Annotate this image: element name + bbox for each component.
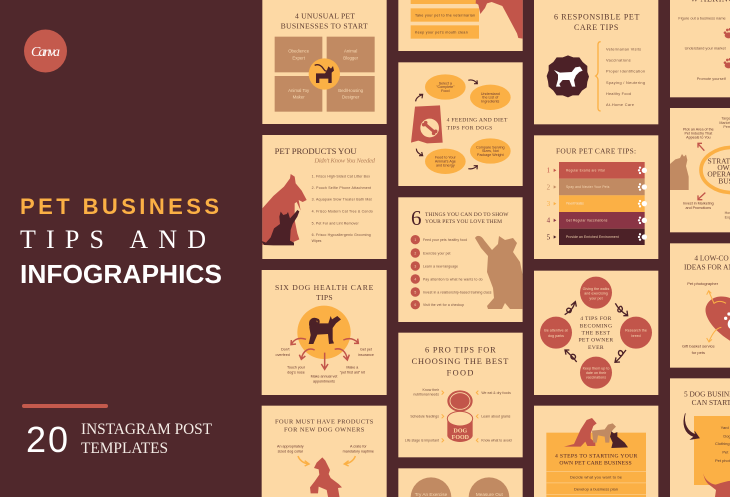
icon: dog on leash bbox=[309, 58, 340, 90]
step rows: Develop a business plan bbox=[574, 486, 618, 491]
heading: CARE TIPS bbox=[574, 23, 618, 32]
illustration: standing dog bbox=[310, 457, 342, 497]
paw icons bbox=[724, 28, 730, 68]
heading bbox=[555, 453, 638, 466]
labels: Promote yourself bbox=[697, 77, 727, 81]
labels: mandatory naptime bbox=[343, 450, 374, 454]
list: Vaccinations bbox=[606, 58, 631, 62]
right tips bbox=[481, 391, 512, 443]
heading bbox=[447, 117, 508, 132]
illustration: dog food can bbox=[447, 390, 473, 442]
heading: BECOMING bbox=[580, 323, 612, 329]
list: 1. Frisco High-Sided Cat Litter Box bbox=[312, 174, 370, 178]
heading bbox=[275, 283, 374, 302]
labels: for pets bbox=[692, 350, 705, 355]
tip circles: date on their bbox=[586, 371, 607, 375]
labels: Pet photographer bbox=[687, 281, 719, 286]
list: Yard bbox=[721, 425, 729, 430]
stacked bars bbox=[559, 162, 645, 245]
top labels: Appeals to You bbox=[686, 136, 711, 140]
quadrant boxes: Designer bbox=[342, 95, 360, 100]
heading: infographics: INFOGRAPHICS bbox=[20, 259, 222, 289]
numbered list: Pay attention to what he wants to do bbox=[423, 277, 483, 281]
numbered list: 5 bbox=[414, 290, 416, 294]
list: 6. Frisco Hypoallergenic Grooming bbox=[312, 233, 371, 237]
arrows bbox=[291, 338, 358, 369]
tip circles: dog parks bbox=[548, 334, 564, 338]
heading: CHOOSING THE BEST bbox=[412, 357, 508, 366]
quadrant boxes: Blogger bbox=[343, 55, 359, 60]
tip circles bbox=[540, 277, 652, 389]
script subheading: Didn't Know You Needed bbox=[313, 157, 376, 164]
ovals with tips: Animal's Age bbox=[435, 159, 456, 163]
top labels bbox=[683, 116, 730, 140]
right tips: Learn about grains bbox=[481, 415, 511, 419]
list: Pet bbox=[722, 449, 729, 454]
illustration: dog food can: FOOD bbox=[452, 435, 470, 441]
orange card bbox=[694, 416, 730, 485]
ovals with tips bbox=[425, 74, 511, 174]
list: Veterinarian Visits bbox=[606, 47, 641, 51]
list: Spaying / Neutering bbox=[606, 81, 645, 85]
labels: Understand your market bbox=[685, 47, 727, 51]
panel: 4 unusual pet businesses bbox=[262, 0, 387, 124]
heading: TIPS FOR DOGS bbox=[447, 126, 492, 132]
tip circles: Keep them up to bbox=[583, 366, 609, 370]
ovals with tips: "Complete" bbox=[436, 85, 455, 89]
list: Proper Identification bbox=[606, 70, 645, 74]
panel: 4 tips for becoming the best pet owner bbox=[534, 271, 658, 395]
circles: Measure Out bbox=[476, 492, 503, 497]
heading bbox=[578, 316, 614, 351]
heading bbox=[684, 254, 730, 271]
heading bbox=[281, 11, 368, 31]
quadrant boxes: Animal Toy bbox=[288, 88, 310, 93]
orange circle with dog bbox=[297, 306, 351, 359]
numbered list: 4 bbox=[414, 277, 416, 281]
labels: Make annual vet bbox=[311, 374, 337, 378]
panel: 6 responsible pet care tips bbox=[534, 0, 658, 124]
heading: FOUR MUST HAVE PRODUCTS bbox=[275, 418, 374, 425]
panel: 6 pro tips for choosing food bbox=[398, 333, 523, 457]
bottom labels: Invest in Marketing bbox=[683, 202, 714, 206]
ovals with tips: the List of bbox=[482, 96, 499, 100]
illustration: dog fragment bbox=[476, 0, 523, 39]
heading: CAN START bbox=[692, 398, 730, 407]
labels: Get pet bbox=[360, 348, 372, 352]
heading bbox=[707, 156, 730, 185]
heading: YOUR PETS YOU LOVE THEM bbox=[425, 219, 502, 225]
panel: six dog health care tips bbox=[262, 270, 387, 395]
list bbox=[312, 174, 373, 243]
numbers and pointers bbox=[547, 167, 556, 241]
tip circles: Be attentive at bbox=[544, 329, 568, 333]
heading: 4 LOW-CO bbox=[694, 254, 729, 263]
labels: Make a bbox=[346, 365, 359, 369]
stacked bars: Regular Exams are Vital bbox=[566, 168, 605, 172]
heading bbox=[425, 212, 509, 225]
heading: THINGS YOU CAN DO TO SHOW bbox=[425, 212, 509, 218]
labels: appointments bbox=[313, 380, 335, 384]
labels bbox=[678, 16, 727, 81]
icon: Canva logo: Canva bbox=[31, 45, 60, 60]
list: Healthy Food bbox=[606, 92, 631, 96]
heading: 6 PRO TIPS FOR bbox=[425, 345, 496, 354]
left tips: Life stage is important bbox=[405, 439, 439, 443]
step rows bbox=[546, 471, 646, 495]
text: instagram post templates: INSTAGRAM POST bbox=[81, 421, 212, 438]
illustration: cat silhouette bbox=[475, 236, 523, 309]
ovals with tips: Feed to Your bbox=[435, 156, 456, 160]
ovals with tips: Select a bbox=[439, 81, 453, 85]
heading: 4 STEPS TO STARTING YOUR bbox=[555, 453, 638, 459]
numbered list: Invest in a relationship-based training class bbox=[423, 290, 492, 294]
stacked bars: Spay and Neuter Your Pets bbox=[566, 185, 610, 189]
bottom labels: and Promotions bbox=[686, 206, 711, 210]
list: 4. Frisco Modern Cat Tree & Condo bbox=[312, 210, 373, 214]
numbers and pointers: 2 bbox=[547, 183, 551, 191]
dark arrow bbox=[684, 413, 699, 439]
orange list rows: Keep your pet's mouth clean bbox=[415, 31, 468, 35]
heading: 6 RESPONSIBLE PET bbox=[554, 12, 639, 21]
heading: pet business: PET BUSINESS bbox=[20, 194, 219, 219]
orange list rows: Take your pet to the veterinarian bbox=[415, 14, 475, 18]
heading bbox=[275, 418, 374, 434]
illustration: three dogs bbox=[564, 418, 628, 448]
numbered list: Feed your pets healthy food bbox=[423, 238, 467, 242]
heading: FOUR PET CARE TIPS: bbox=[556, 146, 636, 155]
circles: Try An Exercise bbox=[415, 492, 448, 497]
illustration: cat bbox=[670, 154, 689, 190]
labels: Don't bbox=[281, 348, 290, 352]
tip circles: Research the bbox=[625, 329, 647, 333]
tip circles: Giving the walks bbox=[583, 287, 609, 291]
numbered list: 1 bbox=[414, 238, 416, 242]
quadrant boxes: Obedience bbox=[288, 49, 310, 54]
numbered list: Visit the vet for a checkup bbox=[423, 303, 464, 307]
arrows bbox=[416, 80, 477, 169]
numbers and pointers: 3 bbox=[547, 200, 551, 208]
heading: 4 TIPS FOR bbox=[580, 316, 612, 322]
list: 5. Pet Fur and Lint Remover bbox=[312, 221, 359, 225]
labels: An appropriately bbox=[277, 445, 304, 449]
illustration: dog bbox=[703, 473, 730, 497]
icon: Canva logo bbox=[24, 30, 67, 72]
text: instagram post templates bbox=[81, 421, 212, 457]
heading: 4 UNUSUAL PET bbox=[295, 11, 355, 20]
labels bbox=[682, 281, 719, 355]
ovals with tips: Food bbox=[441, 89, 450, 93]
heading: tips and: TIPS AND bbox=[20, 225, 206, 254]
stacked bars: Get Regular Vaccinations bbox=[566, 218, 608, 222]
circles bbox=[411, 477, 509, 497]
text: instagram post templates: TEMPLATES bbox=[81, 440, 168, 457]
heading: PET PRODUCTS YOU bbox=[275, 146, 357, 156]
list: Clothing bbox=[715, 441, 730, 446]
labels: dog's nose bbox=[287, 371, 305, 375]
panel: things to show your pets you love them bbox=[398, 197, 523, 322]
paws bbox=[638, 166, 647, 241]
panel: four pet care tips bbox=[534, 135, 658, 259]
chevrons bbox=[442, 391, 478, 442]
left tips: nutritional needs bbox=[413, 393, 439, 397]
illustration: cat silhouette bbox=[261, 210, 299, 245]
step rows: Decide what you want to be bbox=[570, 475, 623, 480]
panel: low cost ideas bbox=[670, 243, 730, 368]
brace bbox=[596, 42, 601, 111]
list bbox=[715, 425, 730, 463]
large numeral 6: 6 bbox=[411, 206, 422, 230]
panel: four must have products bbox=[262, 406, 387, 497]
labels: "pet first aid" kit bbox=[340, 371, 365, 375]
numbered list: 6 bbox=[414, 303, 416, 307]
orange arrows bbox=[298, 456, 355, 466]
ovals with tips: and Energy bbox=[436, 163, 455, 167]
ovals with tips: Package Weight bbox=[477, 153, 504, 157]
tip circles: and exercising bbox=[584, 292, 608, 296]
number: 20: 20 bbox=[26, 419, 68, 460]
labels: A crate for bbox=[350, 445, 367, 449]
illustration: dog food can: DOG bbox=[454, 429, 467, 435]
right tips: Know what to avoid bbox=[481, 439, 512, 443]
panel: strategies for owning and operating a business bbox=[670, 108, 730, 232]
top labels: Pick an Area of the bbox=[683, 128, 714, 132]
illustration: dog silhouette bbox=[262, 174, 307, 245]
labels: Gift basket service bbox=[682, 344, 715, 349]
stacked bars: Provide an Enriched Environment bbox=[566, 235, 619, 239]
stacked bars: Prevent Parasites bbox=[566, 202, 584, 206]
heading: OWN PET CARE BUSINESS bbox=[559, 460, 632, 466]
numbered list: 2 bbox=[414, 251, 416, 255]
numbered list: 3 bbox=[414, 264, 416, 268]
labels bbox=[277, 445, 374, 454]
heading: FOOD bbox=[447, 368, 473, 377]
labels: overfeed bbox=[276, 353, 290, 357]
arrows bbox=[707, 291, 726, 342]
quadrant boxes: Expert bbox=[292, 55, 306, 60]
heading bbox=[554, 12, 639, 32]
left tips: Know their bbox=[423, 388, 440, 392]
heading: TIPS bbox=[316, 293, 333, 302]
orange list rows bbox=[411, 0, 479, 39]
heading: SIX DOG HEALTH CARE bbox=[275, 283, 374, 292]
heading: BUSINESSES TO START bbox=[281, 22, 368, 31]
ovals with tips: Compare Serving bbox=[476, 145, 505, 149]
left cover panel bbox=[20, 30, 222, 460]
panel: walking business fragment bbox=[670, 0, 730, 97]
bottom labels bbox=[683, 202, 730, 219]
heading: 4 FEEDING AND DIET bbox=[447, 117, 508, 123]
left tips: Schedule feedings bbox=[410, 415, 439, 419]
panel: feeding and diet tips bbox=[398, 62, 523, 186]
heading: PET OWNER bbox=[578, 338, 614, 344]
divider bar bbox=[22, 404, 108, 408]
numbers and pointers: 4 bbox=[547, 217, 551, 225]
top labels: Pet Industry That bbox=[684, 132, 712, 136]
panel: dental and vet care fragment bbox=[398, 0, 523, 51]
panel: 5 dog businesses bbox=[670, 378, 730, 497]
panel: pet products bbox=[261, 135, 387, 259]
numbered list: Learn a new language bbox=[423, 264, 458, 268]
arrows bbox=[565, 302, 628, 362]
heading bbox=[684, 390, 730, 407]
tip circles: vaccinations bbox=[586, 376, 606, 380]
list: Wipes bbox=[312, 239, 322, 243]
arrows bbox=[698, 143, 705, 200]
panel: try an exercise fragment bbox=[398, 468, 523, 497]
heading: THE BEST bbox=[582, 331, 611, 337]
numbered list bbox=[411, 235, 492, 309]
heart with paw bbox=[706, 296, 730, 342]
ovals with tips: Ingredients bbox=[481, 100, 500, 104]
heading: EVER bbox=[588, 345, 604, 351]
tip circles: breed bbox=[631, 334, 641, 338]
list bbox=[606, 47, 645, 107]
orange ring bbox=[701, 147, 730, 193]
ovals with tips: Understand bbox=[481, 92, 500, 96]
orange card bbox=[546, 433, 646, 497]
labels: Figure out a business name bbox=[678, 16, 726, 20]
icon: food bag bbox=[411, 105, 443, 143]
quadrant boxes bbox=[275, 37, 375, 112]
list: 2. Pooch Selfie Phone Attachment bbox=[312, 186, 371, 190]
labels bbox=[276, 348, 374, 384]
right tips: We eat & dry foods bbox=[481, 391, 511, 395]
quadrant boxes: Animal bbox=[344, 49, 357, 54]
badge with dog bbox=[547, 55, 589, 97]
list: At-Home Care bbox=[606, 103, 634, 107]
heading: FOR NEW DOG OWNERS bbox=[284, 427, 365, 434]
labels: Touch your bbox=[287, 365, 306, 369]
labels: sized dog collar bbox=[278, 450, 304, 454]
list: 3. Aquapaw Slow Treater Bath Mat bbox=[312, 198, 372, 202]
numbered list: Exercise your pet bbox=[423, 251, 451, 255]
quadrant boxes: Bed/Housing bbox=[338, 88, 364, 93]
heading bbox=[412, 345, 508, 377]
labels: insurance bbox=[358, 353, 374, 357]
left tips bbox=[405, 388, 440, 443]
panel: 4 steps to starting your own pet care business bbox=[534, 406, 658, 497]
tip circles: your pet bbox=[589, 296, 603, 300]
numbers and pointers: 5 bbox=[547, 233, 551, 241]
ovals with tips: Sizes, Not bbox=[482, 149, 499, 153]
quadrant boxes: Maker bbox=[293, 95, 305, 100]
numbers and pointers: 1 bbox=[547, 167, 551, 175]
